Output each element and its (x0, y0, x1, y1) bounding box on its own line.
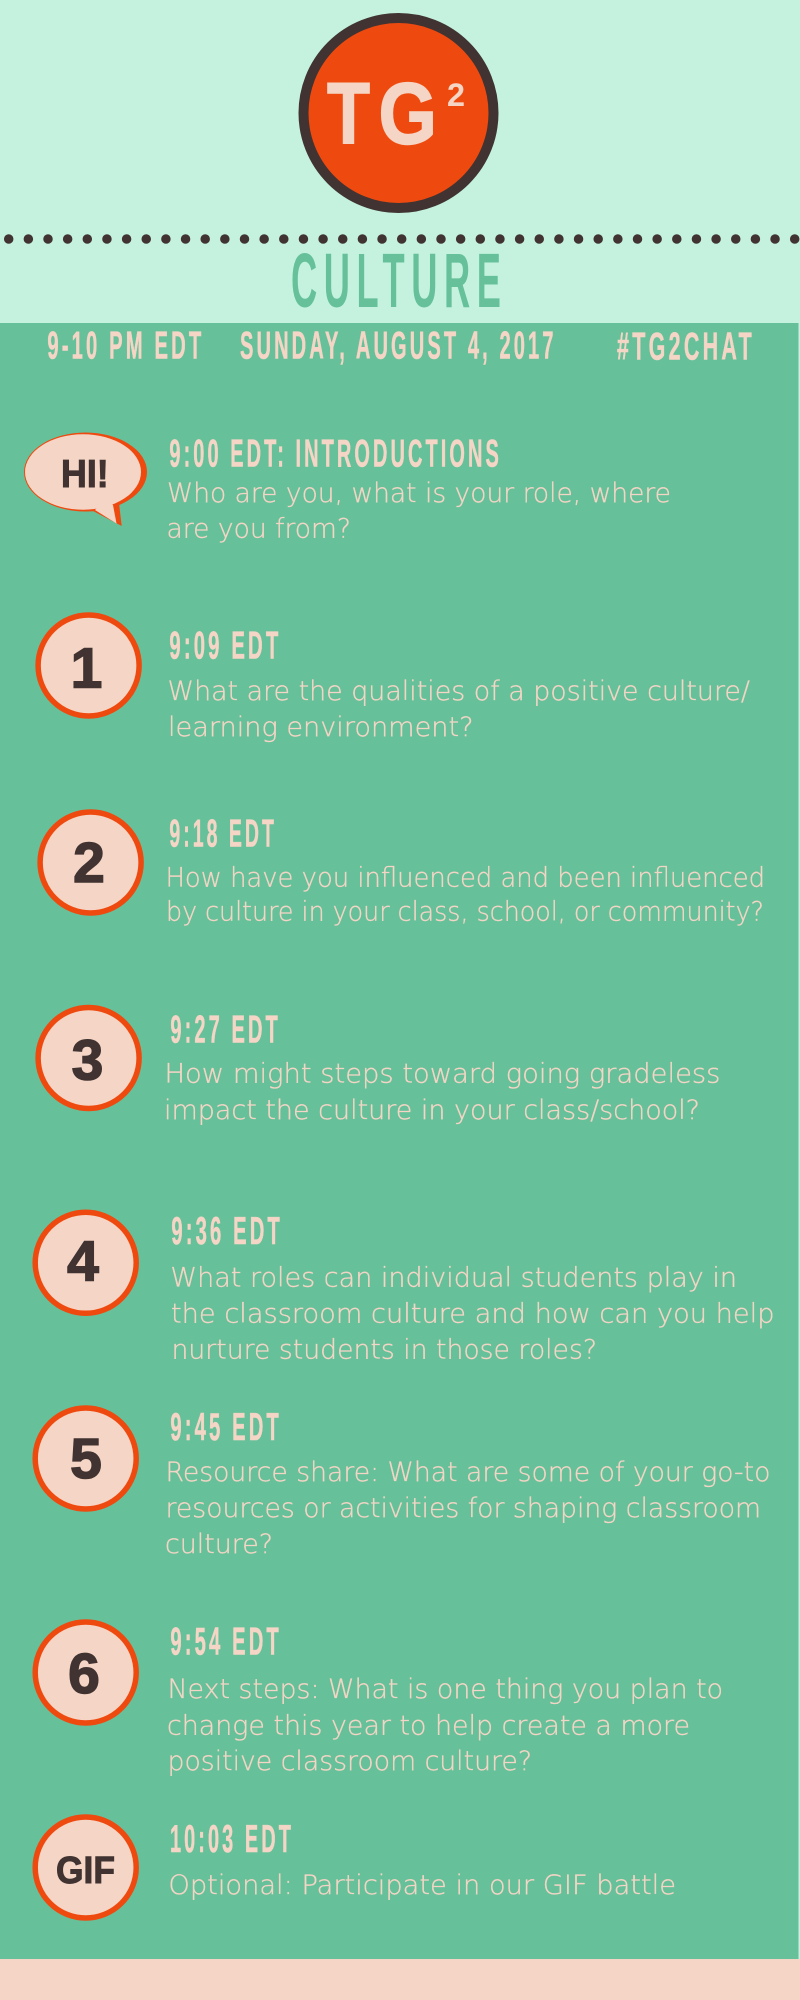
text: question 5: culture? (165, 1529, 273, 1560)
item: question 2 (40, 812, 765, 928)
text: question 5: resources or activities for shaping classroom (166, 1493, 761, 1524)
heading: 9:45: 9:45 EDT (170, 1406, 282, 1449)
item: GIF battle (35, 1817, 676, 1918)
text: intro question: Who are you, what is your role, where (167, 478, 671, 509)
text: question 2: by culture in your class, school, or community? (166, 897, 764, 928)
icon: number 4 (35, 1212, 136, 1313)
logo: TG2 badge: 2 (447, 77, 465, 113)
text: question 5: Resource share: What are some of your go-to (166, 1457, 770, 1488)
icon: number 5: 5 (70, 1427, 102, 1491)
icon: number 5 (35, 1408, 136, 1509)
icon: GIF badge (35, 1817, 136, 1918)
icon: number 6: 6 (68, 1642, 100, 1706)
heading: 9:00: 9:00 EDT: INTRODUCTIONS (169, 432, 502, 476)
text: question 1: What are the qualities of a positive culture/ (168, 676, 750, 707)
icon: number 3 (38, 1008, 139, 1108)
icon: HI speech bubble: HI! (61, 453, 109, 496)
text: question 4: the classroom culture and how can you help (171, 1299, 774, 1330)
icon: number 2 (40, 812, 141, 913)
text: question 2: How have you influenced and been influenced (166, 863, 765, 894)
text: intro question (166, 478, 671, 544)
infographic canvas: CULTURE (291, 238, 508, 324)
heading: 9:18: 9:18 EDT (169, 813, 277, 856)
icon: GIF badge: GIF (56, 1850, 115, 1892)
header background (0, 0, 800, 323)
footer band (0, 1959, 800, 2000)
text: question 1: learning environment? (168, 712, 474, 743)
item: introductions (24, 432, 671, 544)
icon: number 1 (38, 615, 139, 716)
text: GIF battle: Optional: Participate in our GIF battle (168, 1870, 676, 1901)
item: question 4 (35, 1210, 774, 1366)
icon: HI speech bubble (24, 432, 147, 526)
logo: TG2 badge: G (378, 66, 437, 163)
text: question 4: nurture students in those roles? (172, 1335, 597, 1366)
icon: number 2: 2 (73, 831, 105, 895)
heading: 9:09: 9:09 EDT (169, 624, 281, 667)
text: question 5 (165, 1457, 770, 1560)
item: question 5 (35, 1406, 770, 1560)
event details row: 9-10 PM EDT (47, 324, 204, 368)
text: question 4 (170, 1263, 774, 1366)
text: question 6: positive classroom culture? (168, 1746, 532, 1777)
text: question 3: How might steps toward going gradeless (164, 1059, 720, 1090)
heading: 9:36: 9:36 EDT (171, 1210, 283, 1253)
text: question 3: impact the culture in your class/school? (164, 1095, 700, 1126)
text: question 6: change this year to help create a more (167, 1710, 690, 1741)
icon: number 4: 4 (67, 1230, 99, 1294)
text: question 6 (167, 1674, 723, 1777)
logo: TG2 badge: T (327, 66, 370, 163)
text: question 2 (166, 863, 765, 928)
heading: 9:27: 9:27 EDT (170, 1009, 281, 1052)
text: intro question: are you from? (166, 514, 351, 544)
text: question 6: Next steps: What is one thing you plan to (168, 1674, 723, 1705)
icon: number 3: 3 (72, 1028, 103, 1092)
text: question 3 (164, 1059, 720, 1126)
icon: number 1: 1 (71, 637, 102, 701)
item: question 3 (38, 1008, 720, 1126)
logo: TG2 badge (304, 18, 494, 208)
heading: 10:03: 10:03 EDT (170, 1818, 294, 1861)
event details row (47, 324, 755, 368)
text: question 4: What roles can individual students play in (170, 1263, 737, 1294)
heading: 9:54: 9:54 EDT (170, 1621, 282, 1664)
item: question 1 (38, 615, 750, 743)
text: question 1 (168, 676, 750, 743)
item: question 6 (35, 1621, 723, 1777)
icon: number 6 (35, 1622, 136, 1723)
